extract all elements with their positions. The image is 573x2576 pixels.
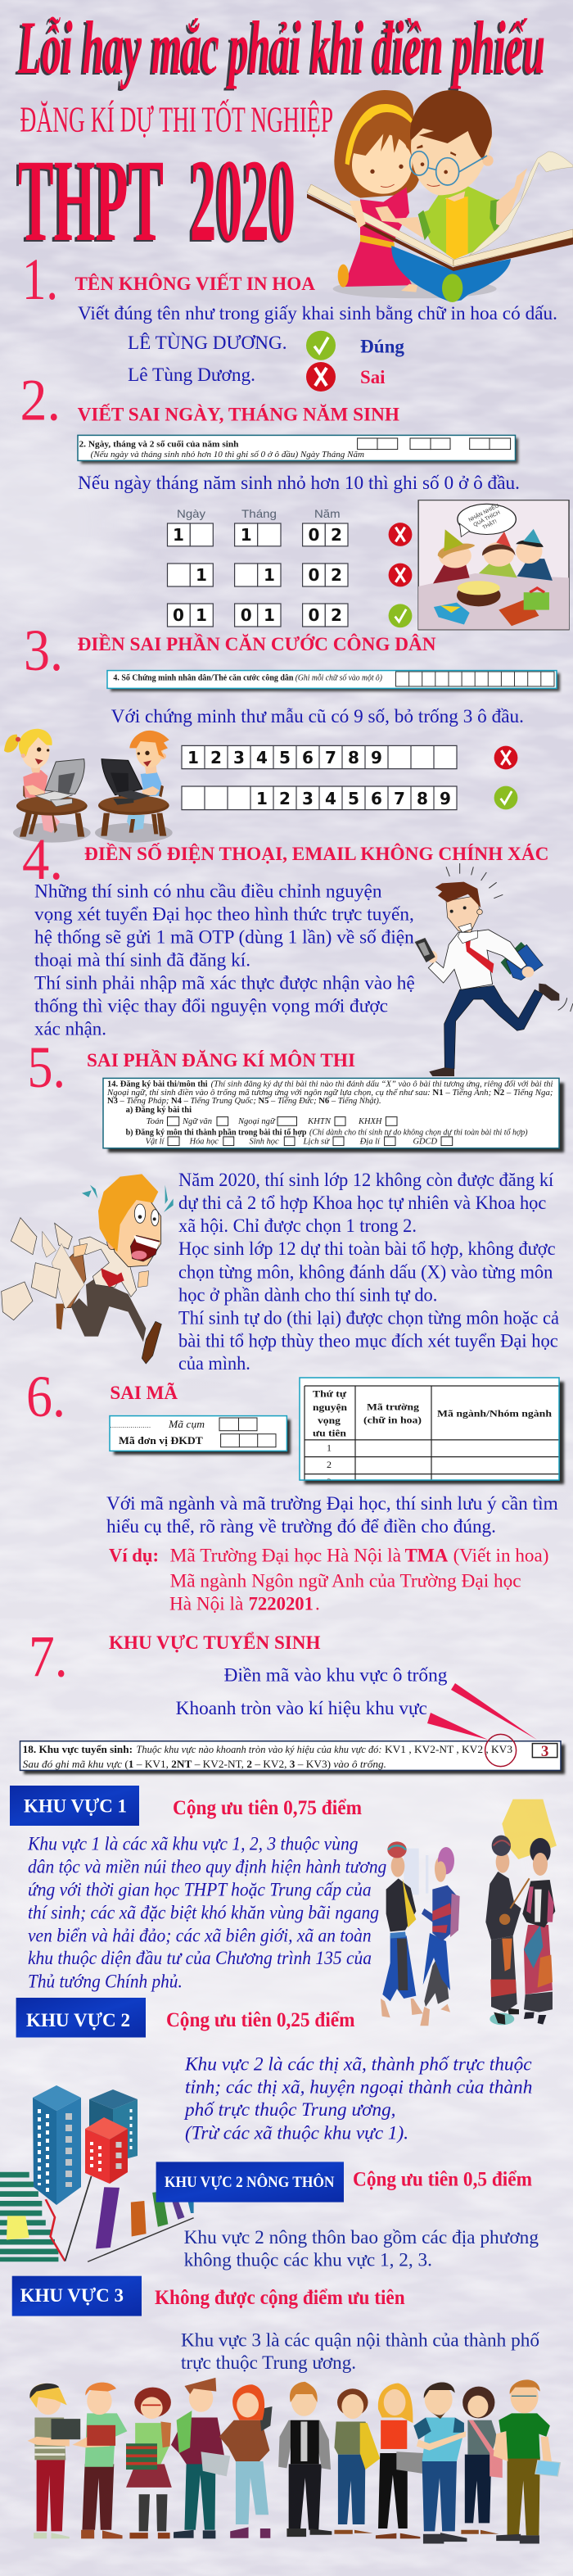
- text: registration rules: Học sinh lớp 12 dự thi toàn bài tổ hợp, không được: [178, 1238, 556, 1259]
- ID example row 1: 8: [348, 748, 359, 767]
- badge: area 2: KHU VỰC 2: [26, 2010, 130, 2030]
- text: area 2 rural description: Khu vực 2 nông thôn bao gồm các địa phương: [184, 2227, 539, 2248]
- form excerpt: subject registration: Vật lí: [146, 1137, 165, 1146]
- date example row 3: 1: [196, 605, 207, 625]
- text: area 1 description: dân tộc và miền núi theo quy định hiện hành tương: [28, 1856, 386, 1877]
- text: wrong name: Lê Tùng Dương.: [128, 364, 255, 385]
- text: example: .: [315, 1593, 320, 1614]
- illustration: birthday party: THẬT!: [481, 517, 499, 531]
- text: registration rules: của mình.: [178, 1353, 250, 1374]
- icons: ID result marks: [494, 746, 517, 809]
- label: wrong: Sai: [360, 367, 386, 387]
- text: 2020: [187, 138, 293, 268]
- form excerpt: cluster and unit code: Mã đơn vị ĐKDT: [119, 1434, 203, 1446]
- panel: area 2 rural: [156, 2162, 539, 2270]
- text: circle symbol: Khoanh tròn vào kí hiệu khu vực: [176, 1698, 427, 1718]
- illustration: group of students: [27, 2378, 560, 2543]
- form excerpt: wishes table: vọng: [318, 1415, 341, 1426]
- text: OTP explanation: hệ thống sẽ gửi 1 mã OTP (dùng 1 lần) về số điện: [34, 926, 414, 947]
- heading 5: SAI PHẦN ĐĂNG KÍ MÔN THI: [87, 1049, 355, 1071]
- text: OTP explanation: thống thì việc thay đổi nguyện vọng mới được: [34, 996, 388, 1016]
- number 4: 4.: [22, 826, 63, 892]
- number 1: 1.: [22, 247, 58, 312]
- text: registration rules: dự thi cả 2 tổ hợp Khoa học tự nhiên và Khoa học: [178, 1193, 546, 1213]
- form excerpt: wishes table: 3: [327, 1476, 332, 1487]
- text: registration rules: học ở phần dành cho thí sinh tự do.: [178, 1285, 437, 1306]
- text: example: Mã Trường Đại học Hà Nội là: [170, 1545, 401, 1565]
- date example row 1: [167, 523, 348, 546]
- heading 7: KHU VỰC TUYỂN SINH: [109, 1632, 321, 1653]
- subtitle: ĐĂNG KÍ DỰ THI TỐT NGHIỆP: [20, 99, 333, 140]
- text: area 2 description: Khu vực 2 là các thị xã, thành phố trực thuộc: [184, 2054, 532, 2074]
- form excerpt: cluster and unit code: [110, 1416, 291, 1455]
- date example row 1: 1: [241, 525, 252, 545]
- text: area 2 description: phố trực thuộc Trung ương,: [183, 2099, 396, 2120]
- heading 4: ĐIỀN SỐ ĐIỆN THOẠI, EMAIL KHÔNG CHÍNH XÁC: [84, 843, 548, 864]
- form excerpt: wishes table: Thứ tự: [313, 1388, 347, 1399]
- form excerpt: subject registration: Ngữ văn: [182, 1117, 212, 1126]
- illustration: city buildings and bar chart: [0, 2085, 194, 2261]
- form excerpt: admission area: KV1 , KV2-NT , KV2 , KV3: [385, 1743, 512, 1755]
- badge: area 3: [12, 2276, 142, 2316]
- ID example row 2: 2: [279, 789, 291, 808]
- text: area 2 rural description: không thuộc các khu vực 1, 2, 3.: [184, 2250, 432, 2270]
- column labels: [177, 507, 341, 520]
- form excerpt: subject registration: Sinh học: [249, 1137, 279, 1146]
- form excerpt: subject registration: (Thí sinh đăng ký dự thi bài thi nào thì đánh dấu “X” vào ô bài thi tương ứng, riêng đối với bài thi: [211, 1080, 553, 1089]
- date example row 2: 0: [309, 565, 319, 585]
- text: registration rules: bài thi tổ hợp thùy theo mục đích xét tuyển Đại học: [178, 1330, 558, 1351]
- date example row 3: 2: [331, 605, 342, 625]
- text: fill code: Điền mã vào khu vực ô trống: [224, 1664, 448, 1686]
- form excerpt: wishes table: Mã ngành/Nhóm ngành: [437, 1407, 552, 1419]
- text: OTP explanation: vọng xét tuyển Đại học theo hình thức trực tuyến,: [34, 904, 414, 925]
- date example row 1: 2: [331, 525, 342, 545]
- student 7: [334, 2388, 380, 2534]
- illustration: panicked student with papers: [2, 1174, 174, 1364]
- form excerpt: subject registration: a) Đăng ký bài thi: [126, 1106, 192, 1115]
- form excerpt: cluster and unit code: Mã cụm: [168, 1418, 205, 1430]
- date example row 1: 1: [173, 525, 184, 545]
- number 5: 5.: [28, 1034, 65, 1100]
- text: area 3 description: trực thuộc Trung ương.: [181, 2352, 356, 2373]
- panel: area 3: [12, 2276, 539, 2373]
- form excerpt: subject registration: N3 – Tiếng Pháp; N4 – Tiếng Trung Quốc; N5 – Tiếng Đức; N6 – Tiếng Nhật).: [107, 1097, 381, 1106]
- priority points 0.25: Cộng ưu tiên 0,25 điểm: [166, 2009, 355, 2031]
- date example row 3: 0: [241, 605, 252, 625]
- date example row 3: 0: [309, 605, 319, 625]
- form excerpt: subject registration: GDCD: [413, 1137, 438, 1146]
- text: example: [109, 1545, 548, 1614]
- text: area 2 rural description: [184, 2227, 539, 2270]
- form excerpt: wishes table: [300, 1378, 564, 1487]
- form excerpt: subject registration: Toán: [147, 1117, 164, 1126]
- text: area 1 description: ứng với thời gian học THPT hoặc Trung cấp của: [28, 1879, 372, 1899]
- panel: area 1: [10, 1786, 557, 2026]
- student 4: [171, 2378, 230, 2538]
- form excerpt: admission area: 3: [541, 1743, 548, 1760]
- form excerpt: admission area: Thuộc khu vực nào khoanh tròn vào ký hiệu của khu vực đó:: [136, 1743, 381, 1755]
- student 3: [126, 2388, 172, 2538]
- student 10: [461, 2387, 503, 2534]
- student 1: [27, 2384, 80, 2538]
- text: area 1 description: khu thuộc diện đầu tư của Chương trình 135 của: [28, 1948, 372, 1968]
- text: area 3 description: [181, 2329, 539, 2373]
- priority points 0.75: Cộng ưu tiên 0,75 điểm: [173, 1797, 362, 1819]
- form excerpt: date of birth: [78, 435, 518, 464]
- number 7: 7.: [29, 1623, 68, 1689]
- ID example row 2: 5: [348, 789, 359, 808]
- student 6: [278, 2382, 332, 2537]
- ID example row 2: 8: [417, 789, 428, 808]
- form excerpt: subject registration: Ngoại ngữ, thí sinh điền vào ô trống mã tương ứng với ngôn ngữ lựa chọn, cụ thể như sau: N1 – Tiếng Anh; N2 – Tiếng Nga;: [106, 1089, 553, 1098]
- text: registration rules: Thí sinh tự do (thi lại) được chọn từng môn hoặc cả: [178, 1307, 559, 1328]
- form excerpt: subject registration: (Chỉ dành cho thí sinh tự do không chọn dự thi toàn bài thi tổ hợp): [309, 1129, 528, 1138]
- icon: check: [306, 331, 336, 360]
- arrow: to circled symbol: [427, 1713, 488, 1740]
- date example row 3: 0: [173, 605, 184, 625]
- form excerpt: subject registration: b) Đăng ký môn thi thành phần trong bài thi tổ hợp: [126, 1129, 307, 1138]
- text: 9-digit rule: Với chứng minh thư mẫu cũ có 9 số, bỏ trống 3 ô đầu.: [111, 706, 524, 727]
- text: area 3 description: Khu vực 3 là các quận nội thành của thành phố: [181, 2329, 539, 2350]
- text: OTP explanation: Những thí sinh có nhu cầu điều chỉnh nguyện: [34, 881, 382, 902]
- icons: date result marks: [389, 523, 412, 627]
- text: OTP explanation: thoại mà thí sinh đã đăng kí.: [34, 950, 250, 971]
- ID example row 1: 9: [371, 748, 382, 767]
- title year: THPT 2020: THPT: [16, 138, 161, 268]
- date example row 2: 1: [196, 565, 207, 585]
- text: example: 7220201: [249, 1593, 314, 1614]
- form excerpt: subject registration: [103, 1078, 564, 1152]
- section 6: [26, 1364, 564, 1614]
- text: example: Ví dụ:: [109, 1545, 159, 1565]
- form excerpt: wishes table: (chữ in hoa): [363, 1414, 422, 1425]
- ID example row 2: 9: [440, 789, 451, 808]
- text: example: Hà Nội là: [169, 1593, 243, 1614]
- form excerpt: wishes table: 2: [327, 1459, 332, 1470]
- text: OTP explanation: xác nhận.: [34, 1019, 106, 1039]
- ID example row 1: 7: [325, 748, 336, 767]
- form excerpt: subject registration: Lịch sử: [302, 1137, 331, 1146]
- text: rule: Nếu ngày tháng năm sinh nhỏ hơn 10 thì ghi số 0 ở ô đầu.: [78, 473, 520, 493]
- ID example row 2: 1: [256, 789, 268, 808]
- text: major and school code note: [106, 1493, 558, 1537]
- section 7: [20, 1623, 565, 1774]
- panel: area 2: [16, 1998, 532, 2143]
- student 2: [72, 2383, 127, 2538]
- text: instruction: Viết đúng tên như trong giấy khai sinh bằng chữ in hoa có dấu.: [78, 303, 557, 324]
- text: example: TMA: [405, 1545, 449, 1565]
- text: OTP explanation: Thí sinh phải nhập mã xác thực được nhận vào hệ: [34, 973, 415, 993]
- number 2: 2.: [20, 367, 61, 432]
- form excerpt: subject registration: 14. Đăng ký bài thi/môn thi: [107, 1080, 208, 1089]
- badge: area 1: [10, 1786, 139, 1826]
- ID example row 1: [182, 745, 457, 769]
- badge: area 3: KHU VỰC 3: [20, 2285, 124, 2306]
- text: area 2 description: [183, 2054, 532, 2143]
- form excerpt: admission area: Sau đó ghi mã khu vực (1 – KV1, 2NT – KV2-NT, 2 – KV2, 3 – KV3) vào ô trống.: [23, 1758, 386, 1770]
- text: registration rules: xã hội. Chỉ được chọn 1 trong 2.: [178, 1216, 417, 1236]
- form excerpt: subject registration: KHTN: [307, 1117, 332, 1126]
- ID example row 2: [182, 786, 457, 810]
- text: registration rules: chọn từng môn, không đánh dấu (X) vào từng môn: [178, 1262, 553, 1283]
- date example row 1: 0: [309, 525, 319, 545]
- form excerpt: ID card: (Ghi mỗi chữ số vào một ô): [296, 673, 382, 683]
- form excerpt: date of birth: 2. Ngày, tháng và 2 số cuối của năm sinh: [79, 440, 239, 450]
- ID example row 1: 1: [187, 748, 199, 767]
- text: correct name: LÊ TÙNG DƯƠNG.: [128, 332, 286, 353]
- form excerpt: admission area: 18. Khu vực tuyển sinh:: [23, 1743, 133, 1755]
- section 3: [4, 618, 560, 843]
- priority points 0.5: Cộng ưu tiên 0,5 điểm: [353, 2169, 532, 2190]
- arrow: to empty box: [451, 1683, 537, 1740]
- illustration: birthday party: [418, 500, 569, 630]
- section 1: [22, 247, 557, 392]
- illustration: children reading a book: [307, 90, 573, 302]
- form excerpt: wishes table: nguyện: [313, 1401, 347, 1413]
- date example row 2: 2: [331, 565, 342, 585]
- no priority points: Không được cộng điểm ưu tiên: [155, 2287, 405, 2309]
- text: OTP explanation: [34, 881, 415, 1039]
- text: area 2 description: tỉnh; các thị xã, huyện ngoại thành của thành: [185, 2076, 532, 2097]
- ID example row 1: 2: [210, 748, 222, 767]
- student 8: [376, 2384, 424, 2538]
- ID example row 2: 3: [302, 789, 314, 808]
- ID example row 2: 6: [371, 789, 382, 808]
- badge: area 2 rural: [156, 2162, 344, 2203]
- section 5: [2, 1034, 564, 1374]
- student 9: [413, 2382, 467, 2543]
- number 6: 6.: [26, 1364, 65, 1429]
- form excerpt: subject registration: Ngoại ngữ: [237, 1117, 276, 1126]
- form excerpt: admission area: [20, 1734, 565, 1774]
- text: area 1 description: [27, 1834, 386, 1991]
- form excerpt: subject registration: Địa lí: [359, 1137, 381, 1146]
- text: 2020: [190, 136, 296, 266]
- form excerpt: ID card: 4. Số Chứng minh nhân dân/Thẻ căn cước công dân: [113, 673, 293, 683]
- form excerpt: subject registration: KHXH: [358, 1117, 382, 1126]
- text: major and school code note: hiểu cụ thể, rõ ràng về trường đó để điền cho đúng.: [106, 1516, 496, 1537]
- title year: THPT 2020: THPT: [18, 136, 164, 266]
- badge: area 1: KHU VỰC 1: [24, 1795, 127, 1817]
- date example row 2: 1: [264, 565, 275, 585]
- ID example row 1: 3: [233, 748, 245, 767]
- section 4: [22, 826, 573, 1076]
- column labels: Năm: [314, 507, 341, 520]
- heading 6: SAI MÃ: [110, 1383, 178, 1403]
- text: area 2 description: (Trừ các xã thuộc khu vực 1).: [185, 2122, 408, 2143]
- form excerpt: ID card: [107, 671, 560, 691]
- form excerpt: wishes table: Mã trường: [367, 1401, 419, 1412]
- date example row 3: 1: [264, 605, 275, 625]
- ID example row 1: 5: [279, 748, 291, 767]
- text: area 1 description: Thủ tướng Chính phủ.: [28, 1971, 183, 1991]
- ID example row 2: 7: [394, 789, 405, 808]
- heading 1: TÊN KHÔNG VIẾT IN HOA: [75, 273, 315, 294]
- badge: area 2: [16, 1998, 146, 2038]
- date example row 2: [167, 564, 348, 586]
- ID example row 2: 4: [325, 789, 336, 808]
- date example row 3: [167, 604, 348, 627]
- text: major and school code note: Với mã ngành và mã trường Đại học, thí sinh lưu ý cần tìm: [106, 1493, 558, 1514]
- column labels: Ngày: [177, 507, 205, 520]
- heading 2: VIẾT SAI NGÀY, THÁNG NĂM SINH: [78, 404, 399, 425]
- heading 3: ĐIỀN SAI PHẦN CĂN CƯỚC CÔNG DÂN: [78, 633, 436, 654]
- text: area 1 description: ven biển và hải đảo; các xã biên giới, xã an toàn: [28, 1925, 372, 1945]
- column labels: Tháng: [241, 507, 277, 520]
- illustration: children at computers: [4, 729, 173, 843]
- illustration: ethnic minority people: [381, 1800, 557, 2026]
- form excerpt: wishes table: 1: [327, 1442, 332, 1453]
- text: registration rules: Năm 2020, thí sinh lớp 12 không còn được đăng kí: [178, 1170, 554, 1190]
- form excerpt: date of birth: (Nếu ngày và tháng sinh nhỏ hơn 10 thì ghi số 0 ở ô đầu) Ngày Tháng Năm: [91, 450, 364, 460]
- number 3: 3.: [24, 618, 63, 683]
- illustration: birthday party: QUÀ THÍCH: [471, 508, 502, 528]
- form excerpt: wishes table: ưu tiên: [313, 1428, 346, 1439]
- student 5: [219, 2384, 273, 2538]
- text: registration rules: [178, 1170, 559, 1374]
- badge: area 2 rural: KHU VỰC 2 NÔNG THÔN: [165, 2173, 335, 2191]
- student 11: [494, 2379, 560, 2543]
- ID example row 1: 4: [256, 748, 268, 767]
- icon: cross: [306, 362, 336, 392]
- section 2: [20, 367, 569, 630]
- text: area 1 description: thí sinh; các xã đặc biệt khó khăn vùng bãi ngang: [28, 1902, 379, 1923]
- text: area 1 description: Khu vực 1 là các xã khu vực 1, 2, 3 thuộc vùng: [27, 1834, 358, 1854]
- label: correct: Đúng: [360, 337, 404, 357]
- illustration: birthday party: NHẬN NHIỀU: [467, 500, 500, 523]
- illustration: running man with phone: [415, 863, 573, 1076]
- text: example: Mã ngành Ngôn ngữ Anh của Trường Đại học: [170, 1571, 521, 1591]
- text: example: (Viết in hoa): [453, 1545, 548, 1565]
- ID example row 1: 6: [302, 748, 314, 767]
- form excerpt: subject registration: Hóa học: [189, 1137, 219, 1146]
